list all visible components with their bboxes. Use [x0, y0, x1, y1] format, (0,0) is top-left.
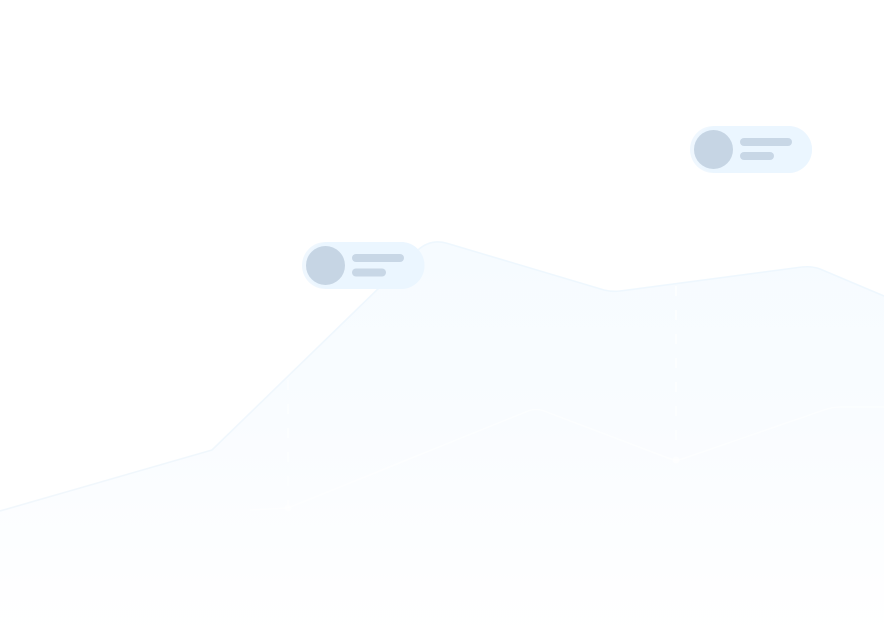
text placeholder bars [740, 138, 792, 160]
area fill [0, 242, 884, 636]
secondary white trend line [250, 407, 884, 512]
avatar circle [694, 130, 733, 169]
area top outline [0, 242, 884, 511]
area chart series [0, 242, 884, 636]
marker dots [284, 504, 292, 512]
callout pill: right [690, 126, 812, 173]
callout pill: left [302, 242, 424, 289]
text placeholder bars [352, 254, 404, 276]
dashed guide lines [288, 286, 676, 508]
avatar circle [306, 246, 345, 285]
